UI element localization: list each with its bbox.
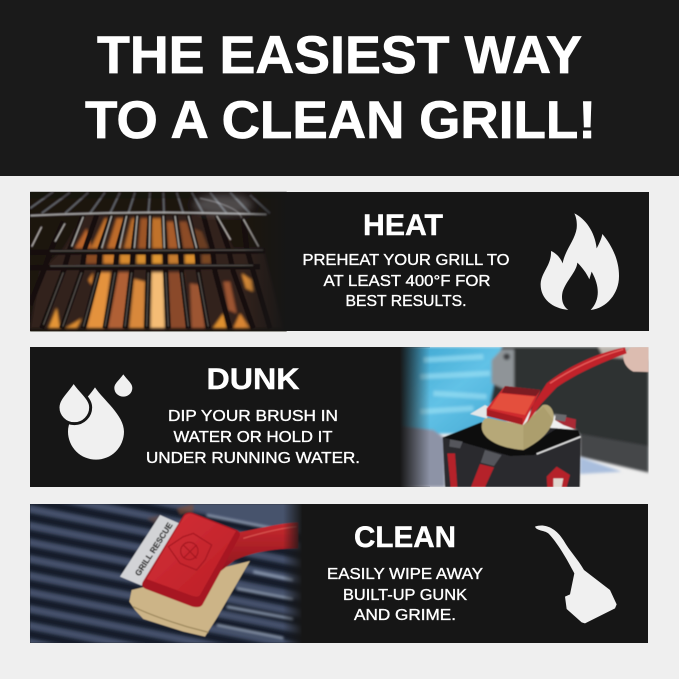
grill stripes [30, 504, 300, 643]
text: dunk instructions: UNDER RUNNING WATER. [146, 450, 360, 467]
brush emblem [168, 533, 212, 570]
scraper label: GRILL RESCUE [133, 520, 175, 578]
grate highlights [30, 212, 267, 248]
back grate [30, 192, 270, 213]
icon: flame [541, 213, 619, 310]
text: dunk instructions [146, 408, 360, 467]
text: dunk instructions: WATER OR HOLD IT [174, 429, 333, 446]
text: clean instructions: AND GRIME. [354, 607, 456, 624]
heading: clean: CLEAN [354, 521, 456, 554]
panel: dunk [30, 347, 649, 487]
photo: flames under grill grate [30, 192, 290, 332]
photo: brush on grill grates [30, 504, 301, 643]
text: heat instructions [302, 252, 510, 310]
grate bars [30, 215, 270, 328]
title: TO A CLEAN GRILL! [85, 91, 596, 150]
icon: water drops [58, 374, 132, 460]
title [85, 26, 596, 150]
text: clean instructions [327, 566, 483, 624]
hand [623, 347, 649, 372]
panel: heat [30, 192, 649, 332]
grill highlights [207, 515, 293, 638]
title: THE EASIEST WAY [97, 26, 582, 85]
text: heat instructions: AT LEAST 400°F FOR [324, 273, 490, 290]
heading: heat: HEAT [363, 209, 443, 242]
text: heat instructions: BEST RESULTS. [346, 293, 466, 310]
photo: brush being dunked into bucket [390, 347, 649, 487]
photo fade [400, 347, 430, 487]
icon: brush silhouette [535, 525, 617, 623]
sponge [482, 405, 554, 450]
text: heat instructions: PREHEAT YOUR GRILL TO [302, 252, 510, 269]
brush handle [527, 347, 627, 423]
text: clean instructions: EASILY WIPE AWAY [327, 566, 483, 583]
panel: clean [30, 504, 648, 643]
brush head [487, 386, 541, 425]
text: dunk instructions: DIP YOUR BRUSH IN [168, 408, 338, 425]
heading: dunk: DUNK [206, 363, 300, 396]
brush handle [220, 522, 298, 572]
coals and flames [30, 215, 283, 328]
photo fade [283, 504, 303, 643]
scraper [470, 405, 492, 418]
photo fade [243, 192, 288, 331]
header banner [0, 0, 679, 176]
bag [443, 414, 581, 487]
scraper [120, 515, 179, 586]
sponge [129, 561, 250, 637]
smoke [193, 194, 253, 216]
brush head [142, 512, 240, 607]
text: clean instructions: BUILT-UP GUNK [343, 587, 467, 604]
